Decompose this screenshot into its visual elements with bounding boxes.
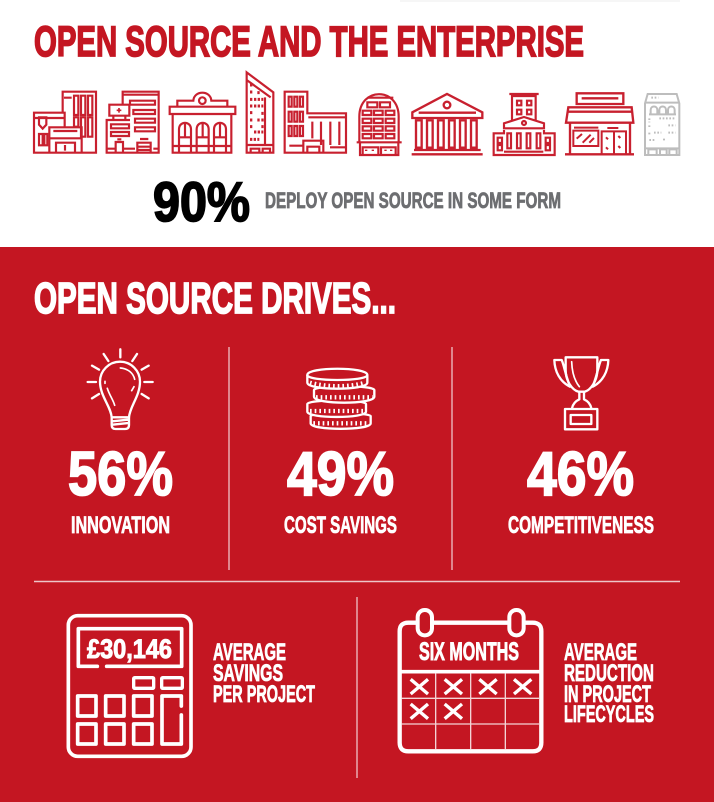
icon: calendar	[400, 610, 541, 751]
stat: 46% competitiveness	[508, 440, 654, 539]
icon: office campus	[34, 92, 96, 153]
stat: 56% innovation	[68, 440, 173, 539]
text: average reduction: LIFECYCLES	[564, 701, 654, 728]
icon: tower	[247, 72, 273, 153]
icon: trophy	[554, 357, 608, 429]
stat: 49% cost savings	[284, 440, 397, 539]
icon: domed block	[357, 94, 402, 155]
icon: hospital	[107, 92, 159, 153]
stat: 56% innovation: 56%	[68, 440, 173, 509]
text: average reduction	[564, 639, 654, 728]
text: average savings: SAVINGS	[213, 660, 283, 687]
stat: 49% cost savings: 49%	[287, 440, 394, 509]
panel: open source drives	[0, 247, 714, 802]
icon: shop	[565, 93, 634, 154]
icon: calendar: SIX MONTHS	[419, 638, 519, 666]
icon row: buildings	[34, 72, 679, 155]
text: average savings: PER PROJECT	[213, 681, 315, 708]
icon: town hall	[494, 94, 555, 155]
text: average reduction: IN PROJECT	[564, 681, 651, 708]
stat: 56% innovation: INNOVATION	[71, 512, 170, 539]
stat label: DEPLOY OPEN SOURCE IN SOME FORM	[265, 188, 561, 213]
icon: arched hall	[170, 93, 235, 153]
text: average reduction: AVERAGE	[564, 639, 637, 666]
text: average reduction: REDUCTION	[564, 660, 654, 687]
icon: grey apartment	[645, 94, 679, 155]
heading: OPEN SOURCE DRIVES...	[34, 274, 396, 323]
stat: 90%: 90%	[153, 170, 250, 233]
icon: calculator	[68, 616, 191, 756]
icon: office block	[285, 92, 346, 153]
text: average savings: AVERAGE	[213, 639, 286, 666]
icon: classical bank	[412, 94, 483, 154]
icon: light bulb	[88, 349, 153, 429]
icon: calculator: £30,146	[87, 634, 172, 664]
icon: coins	[307, 369, 374, 429]
text: average savings	[213, 639, 315, 708]
stat: 49% cost savings: COST SAVINGS	[284, 512, 397, 539]
stat: 46% competitiveness: 46%	[527, 440, 634, 509]
